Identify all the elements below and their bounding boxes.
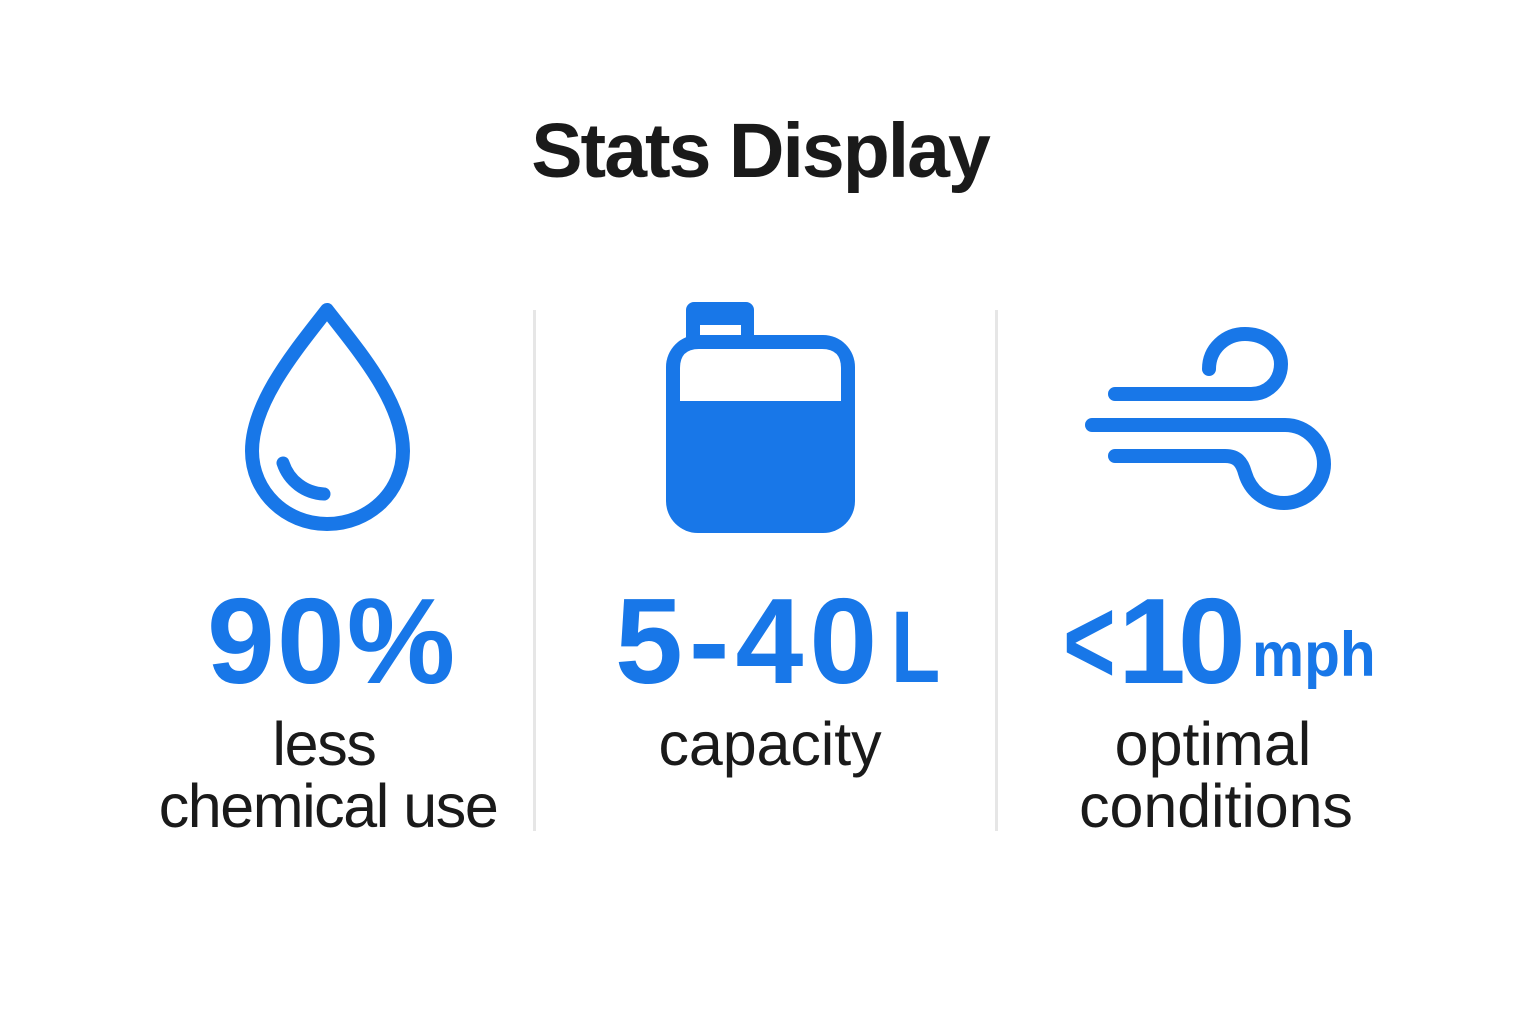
stat: 5-40 L: 5-40 — [615, 573, 883, 709]
icon: water drop — [245, 303, 410, 531]
stat: <10 mph — [1063, 573, 1376, 709]
divider right — [995, 310, 998, 831]
label: less chemical use: chemical use — [159, 772, 497, 840]
label: capacity: capacity — [658, 710, 881, 778]
label: less chemical use — [159, 710, 497, 840]
label: optimal conditions: optimal — [1115, 710, 1311, 778]
stat: <10 mph: 10 — [1118, 573, 1238, 709]
stat: 90%: 90% — [207, 573, 457, 709]
stat: 5-40 L: L — [891, 590, 940, 704]
icon: canister — [666, 302, 855, 533]
stat: <10 mph: < — [1063, 573, 1116, 709]
title: Stats Display — [531, 108, 989, 194]
label: optimal conditions: conditions — [1079, 772, 1353, 840]
divider left — [533, 310, 536, 831]
icon: wind — [1085, 327, 1331, 510]
label: less chemical use: less — [272, 710, 376, 778]
label: optimal conditions — [1079, 710, 1353, 840]
stat: <10 mph: mph — [1252, 620, 1376, 690]
